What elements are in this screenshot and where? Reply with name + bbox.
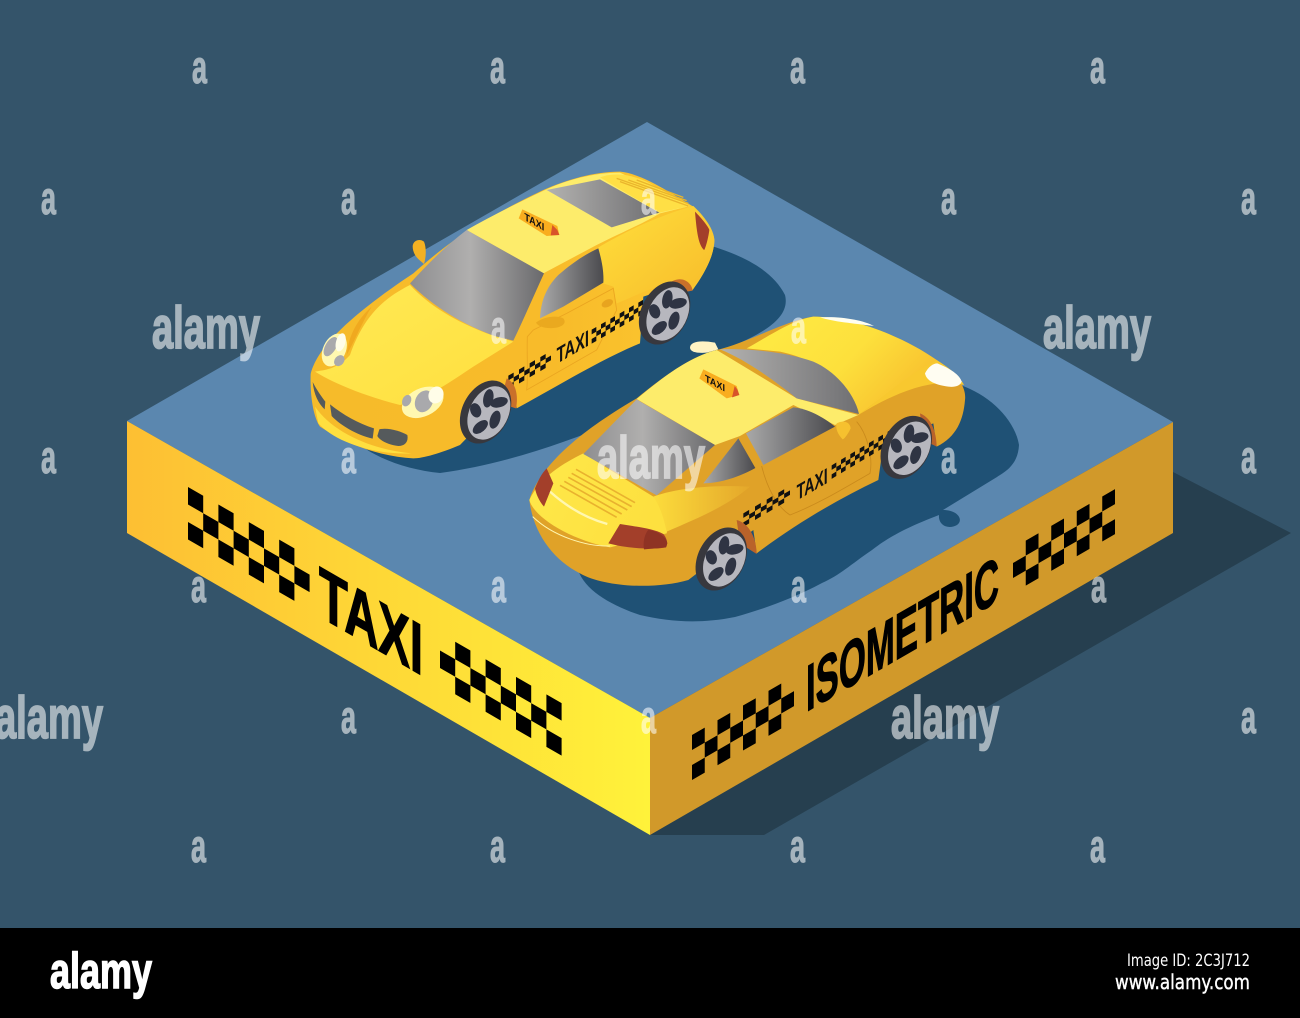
car 1 roof — [467, 173, 690, 273]
car 2 front wheel — [870, 407, 942, 488]
car 2 louvers — [560, 469, 635, 517]
car 2 door line — [762, 422, 871, 515]
car 2 roof sign — [699, 369, 739, 398]
platform top face — [127, 122, 1173, 718]
car 1 mirror far — [413, 240, 426, 264]
watermark: small repeating letters: a — [341, 431, 356, 483]
car 2 side window — [746, 407, 835, 465]
watermark: small repeating letters: a — [490, 41, 505, 93]
platform cast shadow — [650, 472, 1291, 835]
right checker 1 — [692, 676, 794, 780]
car 1 rear window — [547, 179, 659, 227]
watermark: small repeating letters: a — [641, 691, 656, 743]
taxi car 1: front view — [311, 172, 714, 458]
watermark: alamy wordmarks: alamy — [152, 295, 260, 361]
car 1 tail light — [695, 212, 709, 250]
car 1 right headlight — [397, 380, 449, 424]
footer logo: alamy — [50, 943, 152, 999]
watermark: small repeating letters: a — [790, 41, 805, 93]
car 1 side window — [540, 248, 603, 318]
car 1 windshield — [410, 230, 544, 341]
car 2 roof — [637, 350, 858, 445]
watermark: small repeating letters: a — [941, 172, 956, 224]
shadow: car 2 — [578, 385, 1019, 621]
watermark: small repeating letters: a — [1090, 820, 1105, 872]
watermark: alamy wordmarks: alamy — [597, 425, 705, 491]
watermark: small repeating letters: a — [1241, 691, 1256, 743]
footer bar — [0, 928, 1300, 1018]
watermark: small repeating letters: a — [41, 172, 56, 224]
watermark: small repeating letters: a — [1091, 560, 1106, 612]
car 2 rear window — [583, 399, 715, 495]
car 2 headlight — [925, 363, 962, 387]
car 1 side mirror — [536, 317, 565, 328]
car 2 rear side window — [703, 438, 755, 483]
car 1 hood — [315, 285, 513, 405]
car shadows — [360, 240, 1019, 621]
car 2 right tail light — [608, 524, 667, 549]
car 1 checker stripes — [508, 286, 666, 390]
watermark: alamy wordmarks: alamy — [891, 685, 999, 751]
car 2 checker stripes — [743, 421, 906, 527]
car 1 body — [311, 172, 714, 458]
car 2 side text: TAXI — [797, 463, 828, 506]
right checker 2 — [1013, 489, 1115, 593]
watermark: small repeating letters — [41, 41, 1256, 872]
watermark: small repeating letters: a — [791, 301, 806, 353]
heading: ISOMETRIC: ISOMETRIC — [806, 541, 999, 726]
car 1 left headlight — [317, 329, 352, 370]
watermark: small repeating letters: a — [41, 431, 56, 483]
car 1 louvers — [617, 178, 688, 206]
car 1 roof sign: TAXI — [524, 212, 544, 234]
car 1 side text: TAXI — [557, 326, 589, 370]
watermark: alamy wordmarks: alamy — [0, 685, 103, 751]
car 2 body — [529, 317, 965, 586]
platform right face — [650, 422, 1173, 835]
car 2 rear quarter highlight — [653, 486, 750, 532]
car 2 roof sign: TAXI — [705, 373, 725, 395]
watermark: small repeating letters: a — [641, 172, 656, 224]
car 2 wheel arches — [737, 413, 937, 554]
footer url: www.alamy.com — [1115, 970, 1250, 994]
car 1 rear deck — [600, 175, 690, 213]
watermark: small repeating letters: a — [941, 431, 956, 483]
platform left face — [127, 421, 650, 835]
car 1 rear wheel — [629, 273, 701, 353]
car 1 grille — [313, 382, 408, 446]
heading: TAXI: TAXI — [319, 552, 423, 692]
footer image id: Image ID: 2C3J712 — [1127, 951, 1250, 971]
watermark: small repeating letters: a — [191, 820, 206, 872]
watermark: small repeating letters: a — [341, 172, 356, 224]
watermark: small repeating letters: a — [490, 820, 505, 872]
left checker 2 — [440, 633, 562, 756]
car 2 far mirror — [690, 341, 718, 353]
watermark: small repeating letters: a — [1241, 172, 1256, 224]
car 1 door handle — [600, 297, 614, 309]
car 2 near mirror — [836, 422, 851, 439]
watermark: small repeating letters: a — [191, 560, 206, 612]
car 2 rear wheel — [685, 519, 757, 599]
car 2 windshield — [720, 349, 859, 414]
platform — [127, 122, 1173, 835]
watermark: small repeating letters: a — [491, 560, 506, 612]
car 1 bumper lip — [315, 407, 412, 453]
watermark: small repeating letters: a — [341, 691, 356, 743]
car 1 door line — [527, 288, 617, 390]
watermark: small repeating letters: a — [1241, 431, 1256, 483]
car 1 front wheel — [450, 372, 522, 452]
left checker 1 — [188, 487, 310, 610]
watermark: alamy wordmarks — [0, 295, 1151, 751]
watermark: small repeating letters: a — [1090, 41, 1105, 93]
car 2 hood highlight — [820, 317, 874, 326]
car 1 rear quarter — [598, 206, 714, 303]
car 1 wheel arches — [500, 279, 693, 408]
watermark: alamy wordmarks: alamy — [1043, 295, 1151, 361]
watermark: small repeating letters: a — [491, 301, 506, 353]
car 2 rear deck — [529, 453, 668, 547]
taxi car 2: rear view — [529, 317, 965, 599]
car 1 hood shade — [347, 307, 372, 355]
shadow: car 1 — [360, 240, 786, 473]
car 2 hood — [747, 317, 937, 415]
watermark: small repeating letters: a — [790, 820, 805, 872]
watermark: small repeating letters: a — [791, 560, 806, 612]
car 2 rear deck trim line — [533, 517, 610, 546]
watermark: small repeating letters: a — [192, 41, 207, 93]
car 1 roof sign — [519, 209, 559, 236]
car 2 front fender highlight — [858, 360, 964, 415]
car 2 left tail light — [535, 468, 553, 507]
